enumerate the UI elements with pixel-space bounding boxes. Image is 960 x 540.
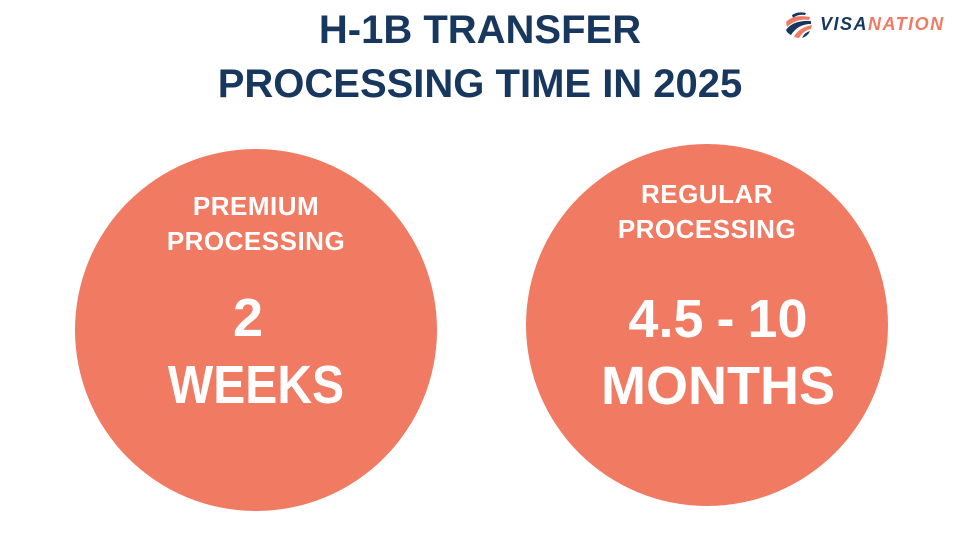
label: premium processing: PROCESSING: [167, 226, 345, 256]
label: regular processing: PROCESSING: [618, 214, 796, 244]
label: premium processing: [167, 191, 345, 256]
panel: regular processing circle: [526, 144, 888, 506]
value: weeks: WEEKS: [168, 355, 344, 415]
label: premium processing: PREMIUM: [193, 191, 319, 221]
label: regular processing: [618, 179, 796, 244]
value: 4.5 - 10 months: [601, 289, 835, 416]
logo: VisaNation: [786, 12, 945, 38]
value: 2: 2: [233, 288, 263, 348]
panel: premium processing circle: [75, 149, 437, 511]
icon: striped globe: [786, 12, 812, 38]
label: regular processing: REGULAR: [641, 179, 773, 209]
value: 4.5 - 10 months: 4.5 - 10: [628, 289, 808, 349]
logo wordmark: VISANATION: [820, 14, 945, 34]
title: [218, 8, 742, 106]
title: H-1B TRANSFER: [319, 8, 641, 52]
title: PROCESSING TIME IN 2025: [218, 62, 742, 106]
value: 4.5 - 10 months: MONTHS: [601, 356, 835, 416]
